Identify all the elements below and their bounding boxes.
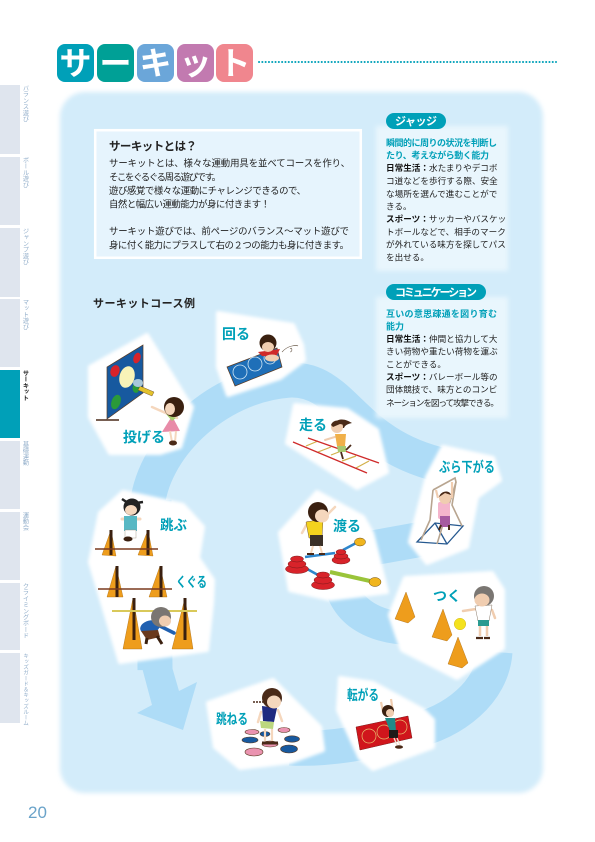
panel: judge: を出せる。 — [386, 252, 429, 262]
title: ッ — [179, 46, 212, 82]
station: spin — [218, 313, 304, 395]
station: hang: ぶら下がる — [439, 459, 495, 475]
text box: what is circuit: サーキット遊びでは、前ページのバランス～マット遊びで — [109, 226, 349, 236]
station: hop: 跳ねる — [216, 711, 248, 727]
text box: what is circuit: サーキットとは、様々な運動用具を並べてコースを作り、 — [109, 158, 350, 168]
heading: course example: サーキットコース例 — [93, 297, 195, 310]
sidebar tabs: キッズガード＆キッズルーム — [22, 653, 29, 726]
station: jump and crawl: 跳ぶ — [160, 517, 187, 533]
sidebar tabs: ジャンプ遊び — [22, 228, 29, 265]
panel: communication: ネーションを図って攻撃できる。 — [386, 397, 499, 408]
panel: judge: が外れている味方を探してパス — [386, 238, 506, 250]
panel: communication: スポーツ：バレーボール等の — [386, 371, 498, 382]
main panel background — [60, 92, 543, 793]
title: サ — [59, 46, 92, 82]
panel: judge: きる。 — [386, 202, 412, 212]
panel: judge: スポーツ：サッカーやバスケッ — [386, 214, 506, 224]
panel: judge: ジャッジ — [395, 115, 437, 128]
title: ト — [218, 46, 251, 82]
station: hop — [208, 680, 323, 768]
title: ー — [99, 46, 132, 82]
panel: judge: たり、考えながら動く能力 — [386, 150, 489, 160]
panel: judge: な場所を選んで進むことがで — [386, 188, 497, 199]
course arrows — [137, 380, 495, 748]
station: roll: 転がる — [347, 687, 379, 703]
panel: judge: 瞬間的に周りの状況を判断し — [386, 137, 497, 148]
station: cross: 渡る — [333, 518, 361, 534]
panel: communication: きい荷物や重たい荷物を運ぶ — [386, 346, 498, 356]
sidebar tabs: 運動会 — [22, 511, 29, 532]
sidebar tabs: バランス遊び — [22, 85, 29, 122]
text box: what is circuit: 遊び感覚で様々な運動にチャレンジできるので、 — [109, 185, 306, 196]
panel: communication: コミュニケーション — [395, 286, 477, 299]
station: jump and crawl: くぐる — [176, 574, 207, 590]
sidebar tabs: サーキット — [22, 370, 29, 401]
text box: what is circuit: 身に付く能力にプラスして右の２つの能力も身に付きます。 — [109, 240, 349, 250]
panel: communication — [376, 284, 508, 418]
station: spin: 回る — [222, 326, 250, 342]
text box: what is circuit: サーキットとは？ — [109, 140, 197, 153]
sidebar tabs: クライミングボード — [22, 583, 29, 639]
station: cross — [280, 492, 387, 599]
panel: judge — [376, 113, 508, 271]
station: jump and crawl — [90, 492, 213, 662]
station: run: 走る — [299, 417, 327, 433]
panel: communication: 互いの意思疎通を図り育む — [386, 308, 497, 319]
title: キ — [139, 46, 172, 82]
station: hang — [410, 447, 500, 563]
panel: communication: 能力 — [386, 320, 404, 332]
sidebar tabs: マット遊び — [22, 299, 29, 330]
station: bounce: つく — [433, 588, 461, 604]
panel: judge: トボールなどで、相手のマーク — [386, 226, 506, 237]
station: throw: 投げる — [123, 429, 165, 445]
sidebar tabs — [0, 85, 29, 726]
text box: what is circuit — [95, 130, 361, 258]
panel: judge: 日常生活：水たまりやデコボ — [386, 162, 498, 173]
station: throw — [90, 335, 192, 453]
panel: communication: 団体競技で、味方とのコンビ — [386, 384, 497, 394]
text box: what is circuit: そこをぐるぐる周る遊びです。 — [109, 172, 221, 182]
panel: communication: ことができる。 — [386, 358, 446, 370]
title — [57, 44, 556, 82]
station: roll — [338, 678, 433, 769]
station: run — [287, 405, 387, 488]
station: bounce — [390, 573, 503, 678]
sidebar tabs: ボール遊び — [22, 157, 29, 188]
sidebar tabs: 基礎運動 — [22, 440, 29, 467]
panel: communication: 日常生活：仲間と協力して大 — [386, 333, 498, 344]
panel: judge: コ道などを歩行する際、安全 — [386, 175, 498, 186]
page number: 20 — [28, 803, 47, 822]
text box: what is circuit: 自然と幅広い運動能力が身に付きます！ — [109, 198, 270, 210]
